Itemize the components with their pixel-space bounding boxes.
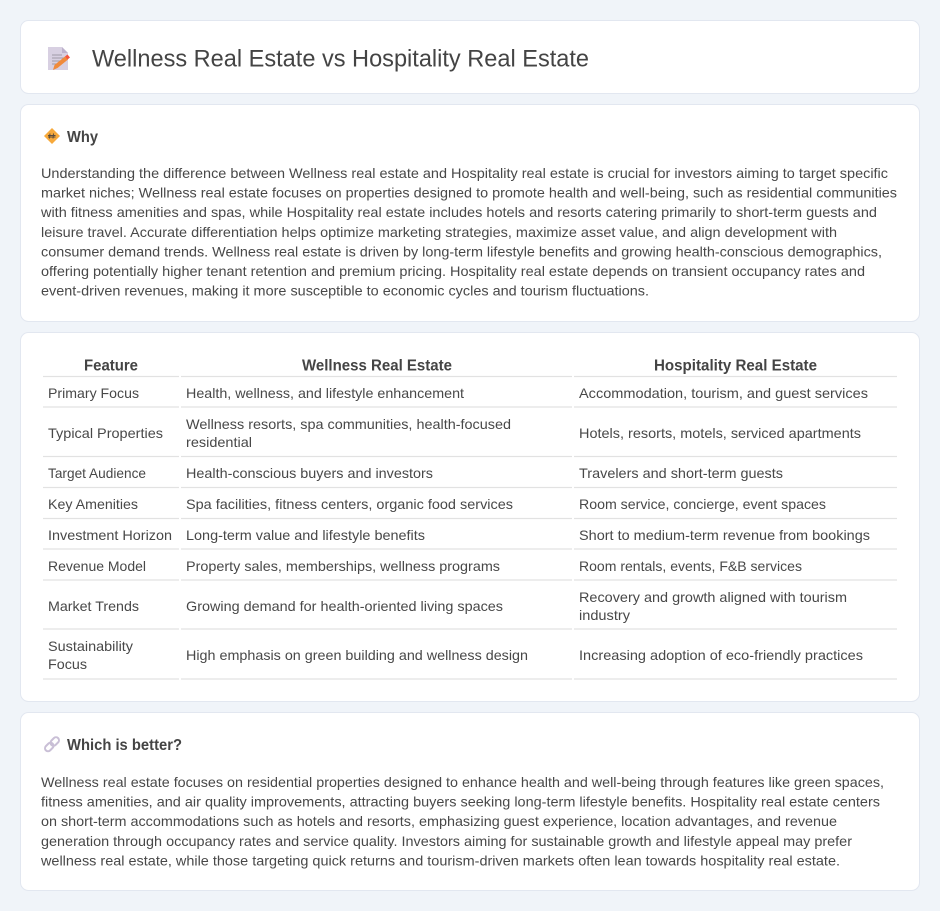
text block: why paragraph: offering potentially higher tenant retention and premium pricing. Hospitality real estate depends on transient occupancy rates and (41, 263, 865, 279)
row: primary focus: Primary Focus (48, 385, 139, 401)
row: key amenities: Spa facilities, fitness centers, organic food services (186, 496, 513, 512)
icon: memo with pencil (48, 47, 70, 70)
table header row: Wellness Real Estate (302, 358, 452, 374)
row: investment horizon: Short to medium-term revenue from bookings (579, 527, 870, 543)
row: market trends: industry (579, 607, 630, 623)
row: target audience (48, 465, 783, 481)
row: sustainability focus: Increasing adoption of eco-friendly practices (579, 647, 863, 663)
panel: why (20, 104, 920, 322)
row: primary focus: Accommodation, tourism, and guest services (579, 385, 868, 401)
title: Wellness Real Estate vs Hospitality Real Estate (92, 46, 589, 72)
row: sustainability focus: Focus (48, 656, 87, 672)
text block: which is better paragraph (40, 774, 884, 868)
text block: why paragraph: Understanding the difference between Wellness real estate and Hospitality real estate is crucial for investors aiming to target specific (41, 165, 888, 181)
table header row: Feature (84, 358, 138, 374)
header panel (20, 20, 920, 94)
text block: why paragraph: market niches; Wellness real estate focuses on properties designed to promote health and well-being, such as residential communities (41, 185, 897, 201)
row: typical properties: Hotels, resorts, motels, serviced apartments (579, 425, 861, 441)
row: key amenities: Room service, concierge, event spaces (579, 496, 826, 512)
row: revenue model (48, 558, 802, 574)
row: investment horizon (48, 527, 870, 543)
text block: which is better paragraph: on short-term accommodations such as hotels and resorts, emphasizing guest experience, location advantages, and revenue (41, 813, 837, 829)
row: sustainability focus: Sustainability (48, 638, 133, 654)
text block: why paragraph: leisure travel. Accurate differentiation helps optimize marketing strategies, maximize asset value, and align development with (41, 224, 837, 240)
text block: which is better paragraph: fitness amenities, and air quality improvements, attracting buyers seeking long-term lifestyle benefits. Hospitality real estate centers (41, 794, 880, 810)
row: typical properties: Typical Properties (48, 425, 163, 441)
row: target audience: Target Audience (48, 465, 146, 481)
text block: which is better paragraph: Wellness real estate focuses on residential properties designed to enhance health and well-being through features like green spaces, (41, 774, 884, 790)
text block: why paragraph: event-driven revenues, making it more susceptible to economic cycles and tourism fluctuations. (41, 283, 649, 299)
panel: which is better (20, 712, 920, 890)
row: market trends: Market Trends (48, 598, 139, 614)
row: typical properties (48, 416, 861, 450)
heading: why: Why (67, 129, 98, 146)
row: typical properties: Wellness resorts, spa communities, health-focused (186, 416, 511, 432)
row: sustainability focus (48, 638, 863, 672)
row: investment horizon: Long-term value and lifestyle benefits (186, 527, 425, 543)
row: market trends: Recovery and growth aligned with tourism (579, 589, 847, 605)
row: revenue model: Revenue Model (48, 558, 146, 574)
table header row (84, 358, 817, 374)
row: target audience: Travelers and short-term guests (579, 465, 783, 481)
text block: why paragraph: with fitness amenities and spas, while Hospitality real estate includes hotels and resorts catering primarily to short-term guests and (40, 204, 877, 220)
row: key amenities: Key Amenities (48, 496, 138, 512)
row: market trends: Growing demand for health-oriented living spaces (186, 598, 503, 614)
table header row: Hospitality Real Estate (654, 358, 817, 374)
text block: which is better paragraph: generation through occupancy rates and service quality. Investors aiming for sustainable growth and lifestyle appeal may prefer (41, 833, 852, 849)
row: key amenities (48, 496, 826, 512)
row: primary focus (48, 385, 868, 401)
row: primary focus: Health, wellness, and lifestyle enhancement (186, 385, 464, 401)
row: revenue model: Property sales, memberships, wellness programs (186, 558, 500, 574)
text block: which is better paragraph: wellness real estate, while those targeting quick returns and tourism-driven markets often lean towards hospitality real estate. (40, 852, 840, 868)
panel: comparison table (20, 332, 920, 702)
text block: why paragraph (40, 165, 897, 299)
row: market trends (48, 589, 847, 623)
row: sustainability focus: High emphasis on green building and wellness design (186, 647, 528, 663)
row: investment horizon: Investment Horizon (48, 527, 172, 543)
text block: why paragraph: consumer demand trends. Wellness real estate is driven by long-term lifestyle benefits and growing health-conscious demographics, (41, 243, 882, 259)
row: revenue model: Room rentals, events, F&B services (579, 558, 802, 574)
row: typical properties: residential (186, 434, 252, 450)
icon: link (44, 736, 60, 752)
icon: orange diamond (44, 128, 60, 144)
heading: which is better: Which is better? (67, 737, 182, 754)
row: target audience: Health-conscious buyers and investors (186, 465, 433, 481)
